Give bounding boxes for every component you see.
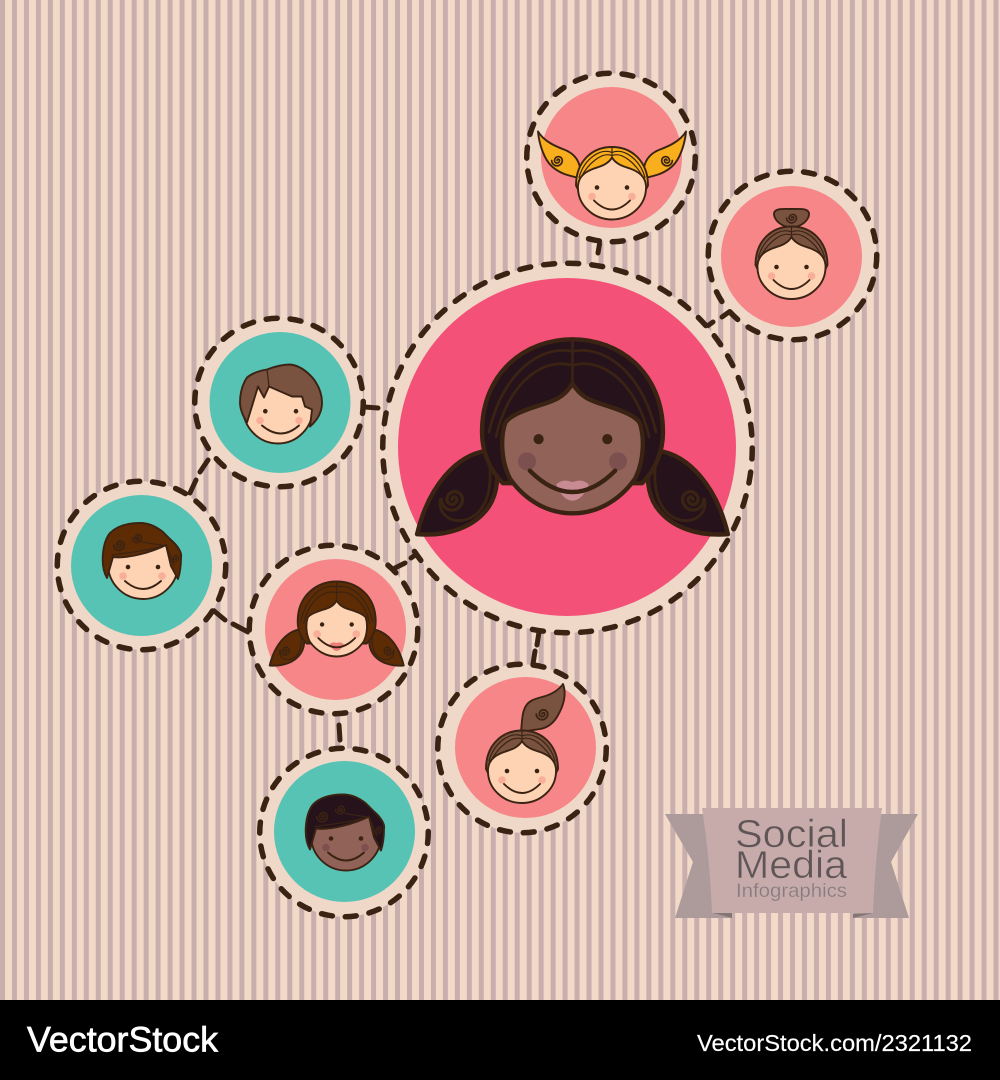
icon: dark skinned boy face bbox=[306, 794, 384, 870]
panel: girl with pigtails contact bbox=[249, 545, 418, 714]
icon: blonde girl face bbox=[538, 132, 686, 220]
ribbon banner bbox=[665, 808, 918, 918]
footer bar bbox=[0, 1000, 1000, 1080]
footer logo: VectorStock bbox=[27, 1020, 219, 1060]
ribbon caption: Infographics bbox=[736, 881, 847, 902]
panel: girl with ponytail contact bbox=[438, 664, 606, 833]
left ribbon tail bbox=[665, 814, 732, 918]
panel: blonde girl contact bbox=[527, 73, 695, 242]
icon: curly haired boy face bbox=[103, 523, 181, 599]
panel: girl with hair bun contact bbox=[708, 171, 877, 340]
icon: boy face bbox=[240, 364, 322, 444]
panel: dark skinned boy contact bbox=[260, 748, 428, 917]
icon: pigtail girl face bbox=[270, 582, 404, 666]
icon: central girl face with pigtails bbox=[417, 339, 728, 535]
ribbon title: Social bbox=[735, 813, 848, 856]
ribbon subtitle: Media bbox=[735, 844, 847, 887]
panel: central profile, dark skinned girl bbox=[383, 263, 752, 633]
panel: boy with brown hair contact bbox=[195, 318, 363, 487]
connectors between circles bbox=[190, 244, 729, 740]
right ribbon tail bbox=[853, 814, 918, 918]
ribbon front bbox=[702, 808, 882, 913]
icon: girl face with ponytail bbox=[486, 684, 565, 803]
icon: girl face with bun bbox=[756, 209, 828, 299]
panel: boy with curly hair contact bbox=[57, 481, 226, 650]
footer image id: VectorStock.com/2321132 bbox=[697, 1030, 972, 1056]
